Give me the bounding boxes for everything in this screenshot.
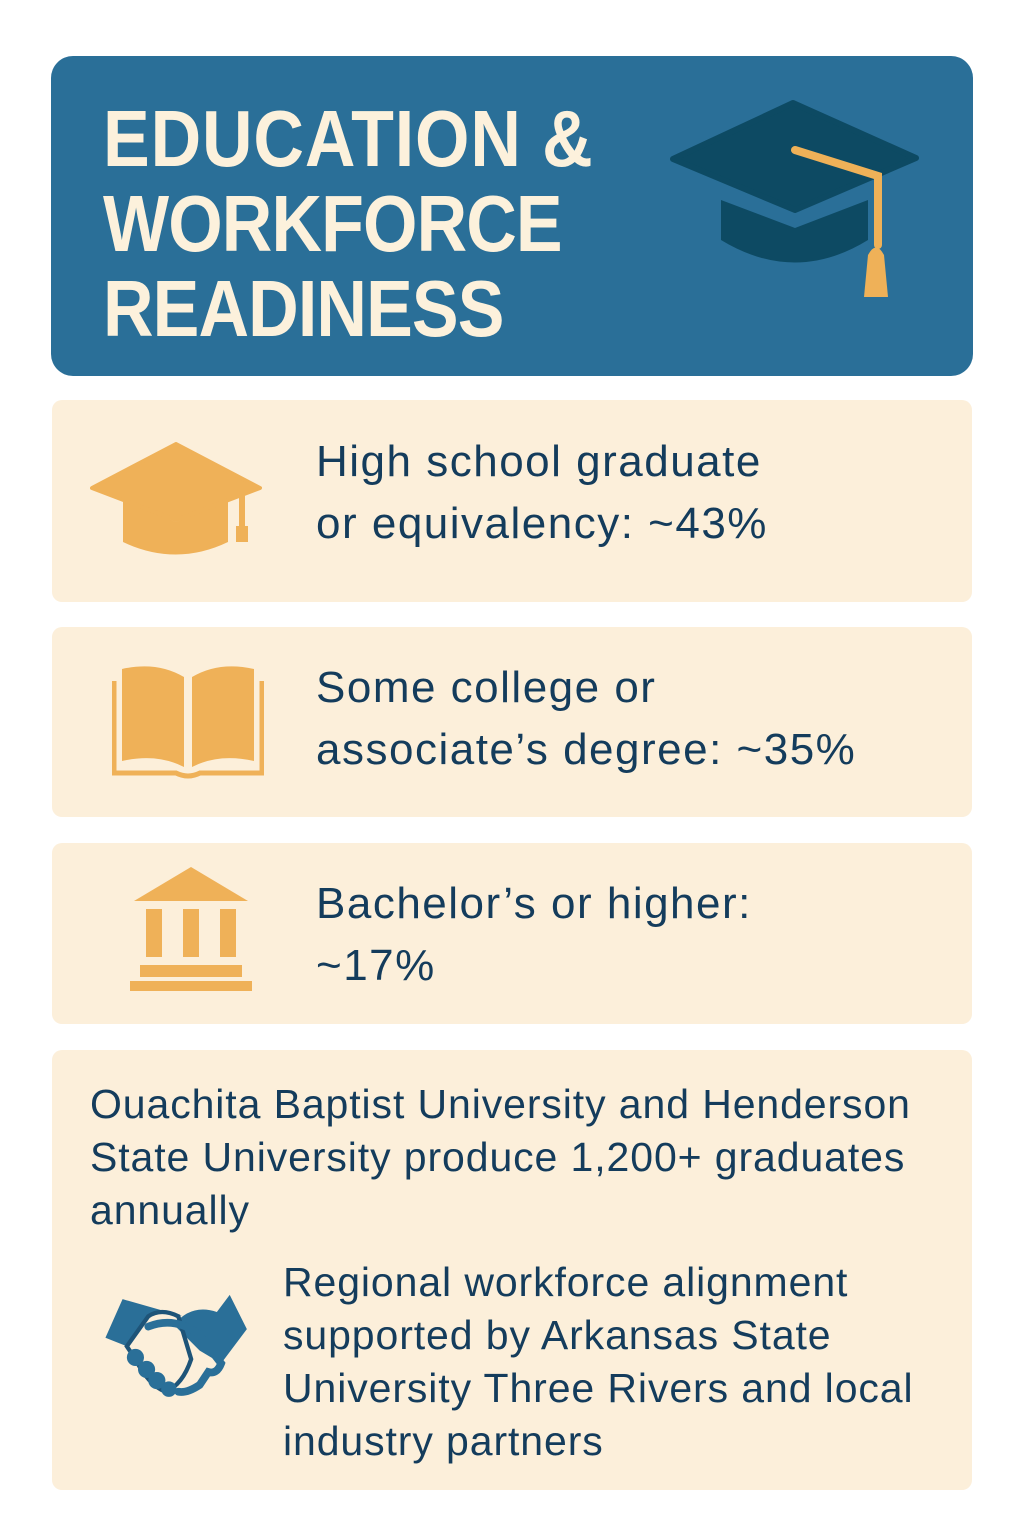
text: universities — [90, 1081, 911, 1233]
text: or equivalency: ~43% — [316, 499, 768, 548]
text: workforce: Regional workforce alignment — [283, 1259, 848, 1305]
panel: bachelor — [52, 843, 972, 1024]
text — [316, 437, 768, 548]
panel: universities — [52, 1050, 972, 1490]
panel: high school — [52, 400, 972, 602]
text: High school graduate — [316, 437, 762, 486]
panel: some college — [52, 627, 972, 817]
text: ~17% — [316, 941, 436, 990]
text — [316, 879, 752, 990]
text: workforce: industry partners — [283, 1418, 604, 1464]
title — [103, 94, 594, 353]
icon: building — [130, 867, 252, 991]
icon: graduation cap — [670, 100, 919, 297]
icon: cap — [90, 442, 262, 554]
text: universities: State University produce 1,200+ graduates — [90, 1134, 905, 1180]
title: READINESS — [103, 264, 504, 353]
title: EDUCATION & — [103, 94, 594, 183]
text: Some college or — [316, 663, 656, 712]
icon: book — [112, 666, 264, 778]
text: workforce: supported by Arkansas State — [283, 1312, 832, 1358]
text: associate’s degree: ~35% — [316, 725, 856, 774]
text — [316, 663, 856, 774]
icon: handshake — [106, 1294, 247, 1397]
text: universities: annually — [90, 1187, 250, 1233]
text: Bachelor’s or higher: — [316, 879, 752, 928]
text: universities: Ouachita Baptist University and Henderson — [90, 1081, 911, 1127]
text: workforce: University Three Rivers and local — [283, 1365, 914, 1411]
text: workforce — [283, 1259, 914, 1464]
title: WORKFORCE — [103, 179, 562, 268]
header panel — [51, 56, 973, 376]
